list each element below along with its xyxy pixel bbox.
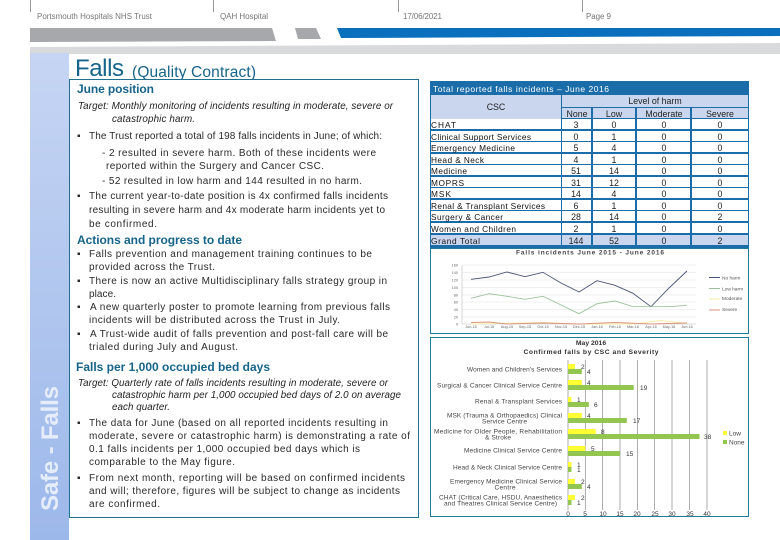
line chart x axis labels: Jun-15 xyxy=(465,325,477,329)
bed days bullets: comparable to the May figure. xyxy=(89,457,235,468)
table: total reported falls incidents: 0 xyxy=(718,155,723,165)
bar value labels: 8 xyxy=(601,429,605,436)
quarterly target: each quarter. xyxy=(112,402,170,413)
bar category labels: Surgical & Cancer Clinical Service Centre xyxy=(437,382,562,390)
line chart y axis labels: 120 xyxy=(452,278,458,282)
line chart x axis labels xyxy=(465,325,693,329)
line chart y axis labels: 60 xyxy=(454,300,458,304)
June bullets: ▪ xyxy=(77,131,81,142)
table: total reported falls incidents: 14 xyxy=(609,212,619,222)
bed days bullets: moderate, severe or catastrophic harm) is demonstrating a rate of xyxy=(89,431,410,442)
June bullets: resulting in severe harm and 4x moderate harm incidents yet to xyxy=(89,205,385,216)
table: total reported falls incidents: 0 xyxy=(662,120,667,130)
line chart y axis labels: 160 xyxy=(452,264,458,268)
table: total reported falls incidents: CHAT xyxy=(431,120,456,130)
side band xyxy=(30,53,69,540)
table: total reported falls incidents: 0 xyxy=(718,166,723,176)
table: total reported falls incidents: 1 xyxy=(612,224,617,234)
line chart x axis labels: Sep-15 xyxy=(519,325,531,329)
line chart x axis labels: Nov-15 xyxy=(555,325,567,329)
June target: catastrophic harm. xyxy=(112,114,195,125)
table: total reported falls incidents: 14 xyxy=(609,166,619,176)
table: total reported falls incidents: CSC xyxy=(487,102,506,112)
table: total reported falls incidents: 2 xyxy=(718,212,723,222)
actions bullets: ▪ xyxy=(77,276,81,287)
actions bullets xyxy=(77,249,390,353)
June bullets: The current year-to-date position is 4x confirmed falls incidents xyxy=(89,191,388,202)
bar category labels: & Stroke xyxy=(485,434,511,442)
bar category labels: Medicine for Older People, Rehabilitation xyxy=(434,428,562,436)
table: total reported falls incidents: 31 xyxy=(571,178,581,188)
table: total reported falls incidents: 0 xyxy=(718,120,723,130)
June bullets: be confirmed. xyxy=(89,219,157,230)
page header: 17/06/2021 xyxy=(403,12,443,21)
bar x axis labels: 5 xyxy=(583,511,587,518)
bed days bullets: ▪ xyxy=(77,473,81,484)
bar x axis labels: 10 xyxy=(599,511,607,518)
table: total reported falls incidents: Renal & Transplant Services xyxy=(431,201,545,211)
page header: QAH Hospital xyxy=(220,12,268,21)
bar x axis labels: 0 xyxy=(566,511,570,518)
quarterly target: catastrophic harm per 1,000 occupied bed days of 2.0 on average xyxy=(112,390,402,401)
actions bullets: provided across the Trust. xyxy=(89,262,215,273)
table: total reported falls incidents: 0 xyxy=(662,189,667,199)
table: total reported falls incidents: MSK xyxy=(431,189,451,199)
June bullets xyxy=(77,131,388,230)
actions bullets: place. xyxy=(89,289,116,300)
title: Falls xyxy=(75,55,124,82)
bar category labels: Head & Neck Clinical Service Centre xyxy=(453,464,562,472)
line chart x axis labels: Dec-15 xyxy=(573,325,585,329)
bed days bullets: From next month, reporting will be based on confirmed incidents xyxy=(89,473,405,484)
bar value labels: 17 xyxy=(633,418,641,425)
actions bullets: incidents will be distributed across the Trust in July. xyxy=(89,315,340,326)
table: total reported falls incidents: 4 xyxy=(612,189,617,199)
page header: Page 9 xyxy=(586,12,612,21)
table: total reported falls incidents: 0 xyxy=(662,236,667,246)
table: total reported falls incidents: 0 xyxy=(662,132,667,142)
actions bullets: ▪ xyxy=(77,249,81,260)
panel: commentary text xyxy=(70,80,418,518)
bar chart title xyxy=(524,340,659,356)
line chart: falls incidents June 2015 to June 2016 xyxy=(430,248,748,334)
table rows xyxy=(431,119,748,233)
heading: June position: June position xyxy=(77,82,154,96)
heading: Falls per 1,000 occupied bed days: Falls per 1,000 occupied bed days xyxy=(76,360,270,374)
table: total reported falls incidents: 0 xyxy=(718,143,723,153)
bar value labels: 6 xyxy=(594,402,598,409)
table: total reported falls incidents: Moderate xyxy=(645,109,683,119)
line chart y axis labels: 40 xyxy=(454,308,458,312)
no harm bars xyxy=(568,369,700,505)
bar category labels: Medicine Clinical Service Centre xyxy=(464,448,562,454)
table: total reported falls incidents: 14 xyxy=(571,189,581,199)
table: total reported falls incidents: Head & Neck xyxy=(431,155,485,165)
quarterly target: Target: Quarterly rate of falls incidents resulting in moderate, severe or xyxy=(78,378,389,389)
actions bullets: A Trust-wide audit of falls prevention and post-fall care will be xyxy=(90,329,388,340)
table: total reported falls incidents: 0 xyxy=(662,166,667,176)
line chart title: Falls incidents June 2015 - June 2016 xyxy=(516,250,664,256)
table: total reported falls incidents: 28 xyxy=(571,212,581,222)
table: total reported falls incidents: 0 xyxy=(718,224,723,234)
bar chart: confirmed falls by CSC and severity xyxy=(430,338,748,518)
line chart x axis labels: Jul-15 xyxy=(484,325,494,329)
table: total reported falls incidents: 1 xyxy=(612,132,617,142)
bar category labels xyxy=(434,366,563,508)
table: total reported falls incidents: 144 xyxy=(569,236,583,246)
table: total reported falls incidents: 4 xyxy=(574,155,579,165)
line chart x axis labels: Apr-16 xyxy=(645,325,657,329)
line chart x axis labels: Mar-16 xyxy=(627,325,639,329)
actions bullets: trialed during July and August. xyxy=(89,342,238,353)
table: total reported falls incidents: 2 xyxy=(574,224,579,234)
bar value labels: 1 xyxy=(577,500,581,507)
table: total reported falls incidents: 0 xyxy=(662,178,667,188)
bar value labels: 1 xyxy=(577,462,581,469)
table: total reported falls incidents: 0 xyxy=(662,155,667,165)
bar value labels: 38 xyxy=(704,434,712,441)
bar value labels: 19 xyxy=(640,385,648,392)
bar value labels: 2 xyxy=(581,479,585,486)
bar value labels: 1 xyxy=(577,397,581,404)
bar chart legend: None xyxy=(729,440,745,446)
bed days bullets: and will; therefore, figures will be subject to change as incidents xyxy=(89,486,400,497)
line chart legend: No harm xyxy=(722,276,740,282)
series: severe harm xyxy=(471,322,687,324)
bed days bullets: are confirmed. xyxy=(89,499,160,510)
bar x axis labels: 30 xyxy=(668,511,676,518)
table: total reported falls incidents: 0 xyxy=(662,224,667,234)
line chart x axis labels: May-16 xyxy=(663,325,675,329)
table: total reported falls incidents: 0 xyxy=(718,178,723,188)
table: total reported falls incidents: MOPRS xyxy=(431,178,464,188)
bar category labels: Women and Children's Services xyxy=(467,366,563,374)
bar category labels: Renal & Transplant Services xyxy=(475,398,563,406)
page header: Portsmouth Hospitals NHS Trust xyxy=(37,12,153,21)
table: total reported falls incidents: None xyxy=(566,109,588,119)
header banner xyxy=(30,28,780,54)
table: total reported falls incidents: Severe xyxy=(706,109,734,119)
table: total reported falls incidents: 5 xyxy=(574,143,579,153)
bar chart title: Confirmed falls by CSC and Severity xyxy=(524,349,659,356)
bed days bullets: The data for June (based on all reported incidents resulting in xyxy=(89,418,388,429)
table: total reported falls incidents: Women and Children xyxy=(431,224,516,234)
table: total reported falls incidents: 0 xyxy=(662,143,667,153)
table: total reported falls incidents: Emergency Medicine xyxy=(431,143,515,153)
line chart gridlines and axes xyxy=(462,265,696,324)
line chart x axis labels: Jan-16 xyxy=(591,325,603,329)
line chart x axis labels: Feb-16 xyxy=(609,325,621,329)
title: (Quality Contract) xyxy=(132,64,256,81)
table: total reported falls incidents: 51 xyxy=(571,166,581,176)
actions bullets: ▪ xyxy=(77,302,81,313)
line chart legend: Low harm xyxy=(722,286,743,292)
low harm bars xyxy=(568,364,596,500)
table: total reported falls incidents: 0 xyxy=(662,212,667,222)
table: total reported falls incidents: 1 xyxy=(612,155,617,165)
heading: Actions and progress to date: Actions and progress to date xyxy=(77,233,242,247)
bar value labels: 4 xyxy=(587,484,591,491)
bar category labels: Centre xyxy=(494,484,516,492)
title xyxy=(75,55,256,82)
table: total reported falls incidents: 2 xyxy=(718,236,723,246)
table: total reported falls incidents: 0 xyxy=(662,201,667,211)
line chart x axis labels: Oct-15 xyxy=(537,325,549,329)
page header xyxy=(30,0,612,21)
line chart y axis labels: 80 xyxy=(454,294,458,298)
bar x axis labels: 35 xyxy=(686,511,694,518)
line chart legend: Severe xyxy=(722,307,738,313)
bar value labels: 5 xyxy=(591,446,595,453)
bar chart legend: Low xyxy=(729,430,741,438)
table: total reported falls incidents: 0 xyxy=(574,132,579,142)
actions bullets: A new quarterly poster to promote learning from previous falls xyxy=(90,302,390,313)
table: total reported falls incidents: 0 xyxy=(718,201,723,211)
bar x axis labels: 40 xyxy=(703,511,711,518)
table: total reported falls incidents: 0 xyxy=(718,132,723,142)
bar chart title: May 2016 xyxy=(576,340,606,347)
table: total reported falls incidents: 0 xyxy=(612,120,617,130)
table: total reported falls incidents: 6 xyxy=(574,201,579,211)
bar category labels: CHAT (Critical Care, HSDU, Anaesthetics xyxy=(439,494,563,502)
bar value labels: 4 xyxy=(587,380,591,387)
bar category labels: Service Centre xyxy=(482,418,527,426)
table: total reported falls incidents: Grand Total xyxy=(431,236,480,246)
bar x axis labels xyxy=(566,511,711,518)
June bullets: The Trust reported a total of 198 falls incidents in June; of which: xyxy=(89,131,382,142)
table: total reported falls incidents xyxy=(430,81,749,248)
line chart y axis labels: 100 xyxy=(452,286,458,290)
bar category labels: Emergency Medicine Clinical Service xyxy=(450,478,562,486)
bar category labels: and Theatres Clinical Service Centre) xyxy=(444,500,557,508)
table: total reported falls incidents: Low xyxy=(606,109,623,119)
line chart y axis labels xyxy=(452,264,458,326)
June bullets: - 2 resulted in severe harm. Both of these incidents were xyxy=(102,148,376,159)
line chart y axis labels: 20 xyxy=(454,316,458,320)
June bullets: - 52 resulted in low harm and 144 resulted in no harm. xyxy=(102,176,362,187)
bar value labels: 1 xyxy=(577,467,581,474)
actions bullets: Falls prevention and management training continues to be xyxy=(89,249,372,260)
bed days bullets: ▪ xyxy=(77,418,81,429)
series: no harm xyxy=(471,271,687,307)
bar chart gridlines xyxy=(568,360,707,510)
line chart x axis labels: Jun-16 xyxy=(681,325,693,329)
bar value labels: 2 xyxy=(581,364,585,371)
bed days bullets xyxy=(77,418,410,510)
bar value labels: 2 xyxy=(581,495,585,502)
line chart legend xyxy=(709,276,743,313)
series: moderate harm xyxy=(471,320,687,324)
table: total reported falls incidents: Surgery & Cancer xyxy=(431,212,503,222)
bed days bullets: 0.1 falls incidents per 1,000 occupied bed days which is xyxy=(89,444,360,455)
bar value labels: 4 xyxy=(587,369,591,376)
table: total reported falls incidents: 12 xyxy=(609,178,619,188)
table: total reported falls incidents: Clinical Support Services xyxy=(431,132,531,142)
table: total reported falls incidents: 52 xyxy=(609,236,619,246)
line chart legend: Moderate xyxy=(722,296,743,302)
bar x axis labels: 25 xyxy=(651,511,659,518)
table: total reported falls incidents: 3 xyxy=(574,120,579,130)
table: total reported falls incidents: 0 xyxy=(718,189,723,199)
June target: Target: Monthly monitoring of incidents resulting in moderate, severe or xyxy=(78,101,394,112)
side band: Safe - Falls xyxy=(37,386,64,511)
bar x axis labels: 20 xyxy=(633,511,641,518)
series: low harm xyxy=(471,294,687,314)
line chart y axis labels: 140 xyxy=(452,271,458,275)
actions bullets: There is now an active Multidisciplinary falls strategy group in xyxy=(89,276,387,287)
June bullets: ▪ xyxy=(77,191,81,202)
table: total reported falls incidents: Medicine xyxy=(431,166,467,176)
table title: Total reported falls incidents – June 2016 xyxy=(433,84,609,94)
bar x axis labels: 15 xyxy=(616,511,624,518)
bar value labels xyxy=(577,364,712,507)
actions bullets: ▪ xyxy=(77,329,81,340)
June bullets: reported within the Surgery and Cancer CSC. xyxy=(106,161,324,172)
quarterly target xyxy=(78,378,402,413)
line chart x axis labels: Aug-15 xyxy=(501,325,513,329)
line chart y axis labels: 0 xyxy=(456,322,458,326)
table: total reported falls incidents: 4 xyxy=(612,143,617,153)
bar value labels: 4 xyxy=(587,413,591,420)
June target xyxy=(78,101,394,125)
bar chart legend xyxy=(723,430,745,446)
table: total reported falls incidents: 1 xyxy=(612,201,617,211)
bar category labels: MSK (Trauma & Orthopaedics) Clinical xyxy=(447,412,563,420)
table: total reported falls incidents: Level of harm xyxy=(628,96,682,106)
bar value labels: 15 xyxy=(626,451,634,458)
